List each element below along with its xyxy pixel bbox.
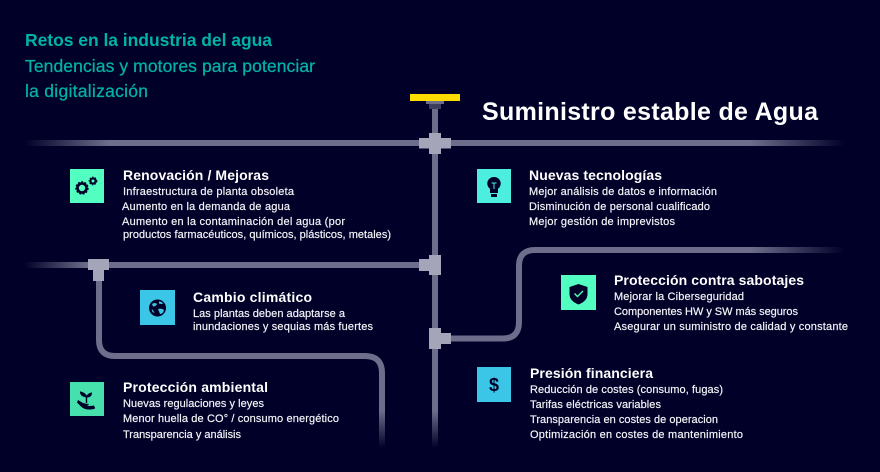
text: protección ambiental: Protección ambiental <box>123 379 268 395</box>
text: presión financiera: Reducción de costes (consumo, fugas) <box>530 384 723 396</box>
text: protección ambiental <box>123 379 339 441</box>
text: protección ambiental: Menor huella de CO° / consumo energético <box>123 413 339 425</box>
top horizontal pipe <box>24 140 845 146</box>
text: protección contra sabotajes: Asegurar un suministro de calidad y constante <box>614 321 848 333</box>
text: presión financiera: Presión financiera <box>530 365 653 381</box>
text: renovación: Renovación / Mejoras <box>123 167 269 183</box>
panel: renovación / mejoras <box>70 167 391 241</box>
text: nuevas tecnologías: Nuevas tecnologías <box>529 167 662 183</box>
icon: gears <box>70 169 104 203</box>
text: nuevas tecnologías <box>529 167 717 228</box>
text: cambio climático <box>193 289 374 333</box>
panel: presión financiera <box>477 365 743 441</box>
text: protección contra sabotajes <box>614 272 848 333</box>
heading: retos en la industria del agua <box>25 30 315 101</box>
text: protección ambiental: Nuevas regulaciones y leyes <box>123 398 264 410</box>
heading: retos en la industria del agua: Tendencias y motores para potenciar <box>25 56 315 76</box>
icon: dollar: $ <box>489 375 499 395</box>
text: cambio climático: Cambio climático <box>193 289 312 305</box>
text: renovación: Infraestructura de planta obsoleta <box>123 186 295 198</box>
heading: retos en la industria del agua: la digitalización <box>25 81 148 101</box>
text: protección contra sabotajes: Componentes HW y SW más seguros <box>614 306 798 318</box>
text: presión financiera: Transparencia en costes de operacion <box>530 414 718 426</box>
text: renovación: productos farmacéuticos, químicos, plásticos, metales) <box>123 229 391 241</box>
main title: Suministro estable de Agua <box>482 98 819 126</box>
text: cambio climático: Las plantas deben adaptarse a <box>193 308 346 320</box>
text: protección contra sabotajes: Mejorar la Ciberseguridad <box>614 291 744 303</box>
panel: cambio climático <box>140 289 374 333</box>
valve: yellow cap <box>410 94 460 109</box>
panel: protección ambiental <box>70 379 339 441</box>
text: presión financiera: Tarifas eléctricas variables <box>530 399 662 411</box>
left branch pipe <box>99 275 382 448</box>
text: renovación: Aumento en la demanda de agua <box>122 201 291 213</box>
icon: plant in hand <box>70 382 104 416</box>
main vertical pipe <box>432 109 438 448</box>
panel: nuevas tecnologías <box>477 167 717 228</box>
text: presión financiera <box>530 365 743 441</box>
fitting: middle tee <box>419 255 441 275</box>
fitting: cross <box>419 133 451 154</box>
panel: protección contra sabotajes <box>561 272 848 333</box>
text: cambio climático: inundaciones y sequias más fuertes <box>193 321 374 333</box>
fitting: left tee <box>88 259 109 281</box>
fitting: lower tee <box>429 328 451 349</box>
text: nuevas tecnologías: Disminución de personal cualificado <box>529 201 710 213</box>
text: protección ambiental: Transparencia y análisis <box>123 429 242 441</box>
icon: shield <box>561 275 596 310</box>
text: protección contra sabotajes: Protección contra sabotajes <box>614 272 804 288</box>
icon: light bulb <box>477 169 511 203</box>
text: presión financiera: Optimización en costes de mantenimiento <box>530 429 743 441</box>
heading: retos en la industria del agua: Retos en la industria del agua <box>25 30 272 50</box>
text: nuevas tecnologías: Mejor análisis de datos e información <box>529 186 717 198</box>
pipe network <box>24 94 845 448</box>
icon: dollar <box>477 367 511 402</box>
icon: globe <box>140 290 175 325</box>
text: nuevas tecnologías: Mejor gestión de imprevistos <box>529 216 676 228</box>
text: renovación <box>122 167 391 241</box>
right branch pipe <box>445 250 845 338</box>
text: renovación: Aumento en la contaminación del agua (por <box>122 216 345 228</box>
middle left horizontal pipe <box>24 262 428 268</box>
